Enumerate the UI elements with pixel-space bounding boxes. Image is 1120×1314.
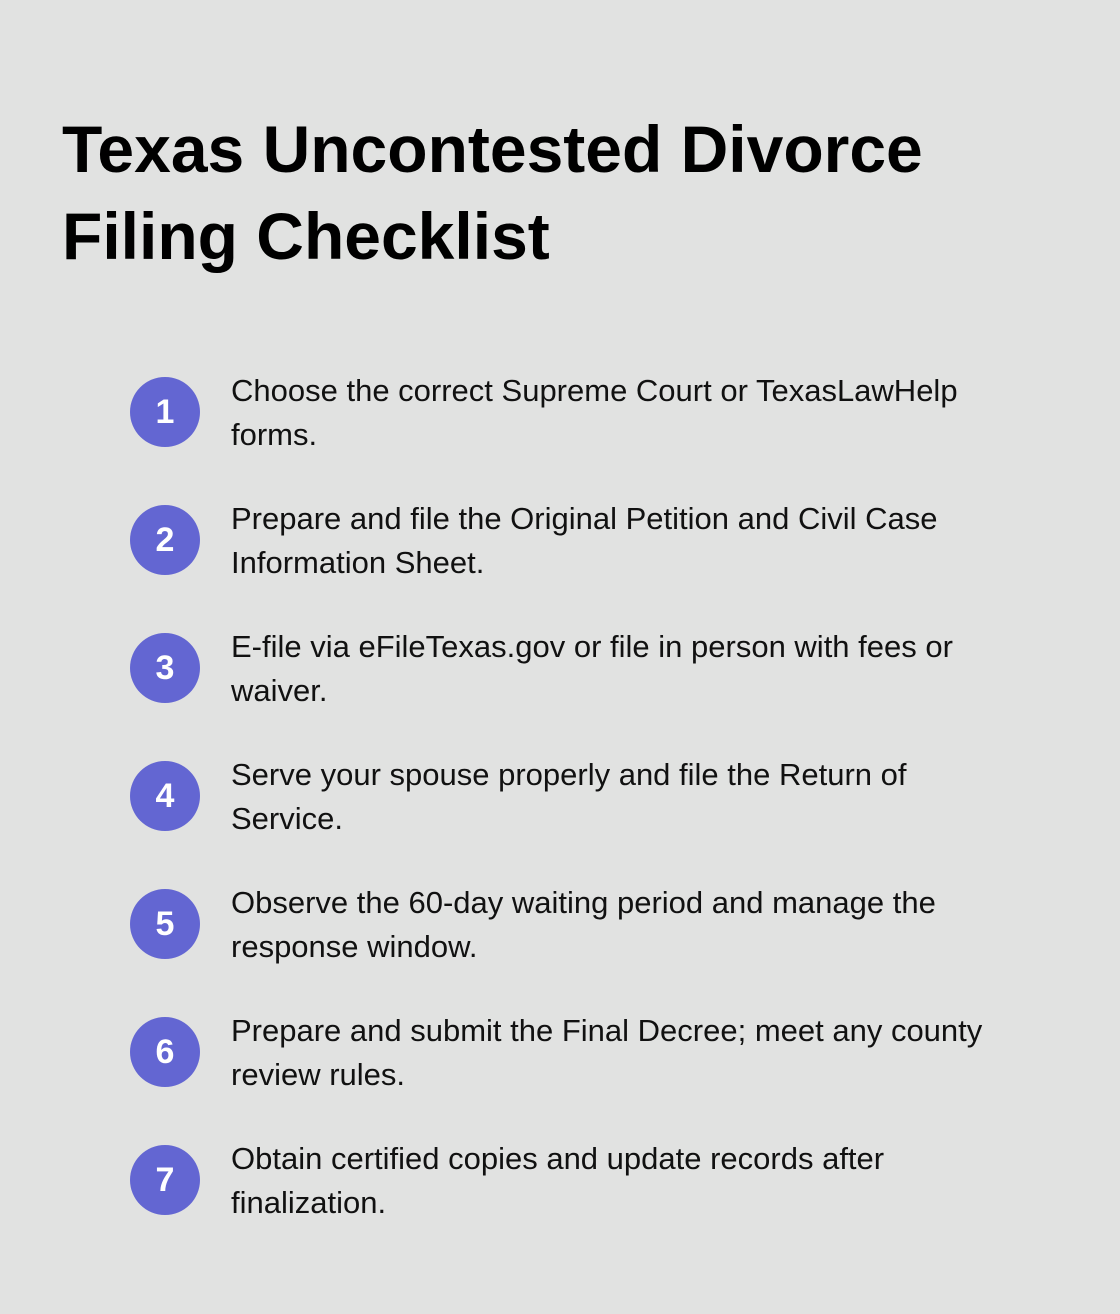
circle 3: 3 [156, 649, 174, 687]
circle 4: 4 [156, 777, 174, 815]
text 3: waiver. [231, 673, 327, 708]
circle 2: 2 [156, 521, 174, 559]
text 6: review rules. [231, 1057, 405, 1092]
step 5 [130, 885, 936, 964]
text 2: Information Sheet. [231, 545, 484, 580]
circle 2 [130, 505, 200, 575]
text 6 [231, 1013, 982, 1092]
step 6 [130, 1013, 982, 1092]
step 3 [130, 629, 953, 708]
text 6: Prepare and submit the Final Decree; meet any county [231, 1013, 982, 1048]
circle 1: 1 [156, 393, 174, 431]
circle 5: 5 [156, 905, 174, 943]
circle 4 [130, 761, 200, 831]
text 1: forms. [231, 417, 317, 452]
text 1 [231, 373, 958, 452]
text 5: response window. [231, 929, 477, 964]
text 5: Observe the 60-day waiting period and manage the [231, 885, 936, 920]
text 7: Obtain certified copies and update records after [231, 1141, 884, 1176]
text 1: Choose the correct Supreme Court or TexasLawHelp [231, 373, 958, 408]
text 3: E-file via eFileTexas.gov or file in person with fees or [231, 629, 953, 664]
text 4 [231, 757, 907, 836]
circle 7: 7 [156, 1161, 174, 1199]
title: Filing Checklist [62, 199, 550, 273]
text 7 [231, 1141, 884, 1220]
text 3 [231, 629, 953, 708]
text 4: Serve your spouse properly and file the Return of [231, 757, 906, 792]
step 2 [130, 501, 938, 580]
text 5 [231, 885, 936, 964]
circle 7 [130, 1145, 200, 1215]
circle 6 [130, 1017, 200, 1087]
circle 1 [130, 377, 200, 447]
title [62, 112, 923, 273]
text 2 [231, 501, 938, 580]
title: Texas Uncontested Divorce [62, 112, 923, 186]
step 4 [130, 757, 907, 836]
step 1 [130, 373, 958, 452]
circle 6: 6 [156, 1033, 174, 1071]
text 4: Service. [231, 801, 343, 836]
step 7 [130, 1141, 884, 1220]
text 7: finalization. [231, 1185, 386, 1220]
circle 3 [130, 633, 200, 703]
circle 5 [130, 889, 200, 959]
text 2: Prepare and file the Original Petition and Civil Case [231, 501, 938, 536]
